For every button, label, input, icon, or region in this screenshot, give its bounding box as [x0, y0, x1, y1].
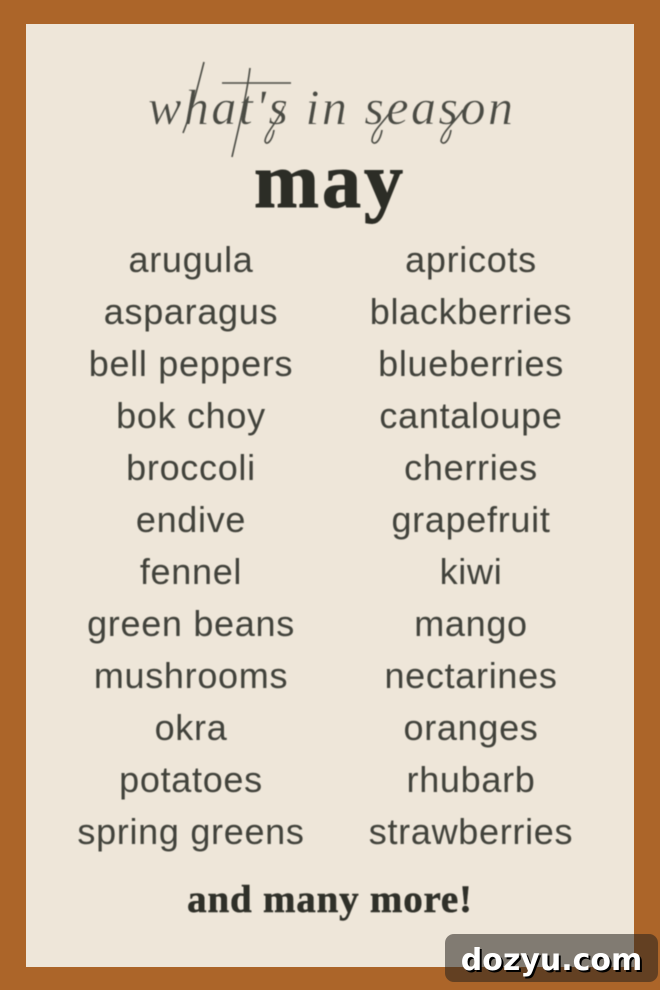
- footer text: and many more!: [187, 878, 473, 921]
- text: arugula: [128, 239, 254, 280]
- text: blackberries: [370, 291, 572, 332]
- text: blueberries: [378, 343, 564, 384]
- text: spring greens: [77, 811, 305, 852]
- text: potatoes: [119, 759, 263, 800]
- watermark badge: [445, 934, 658, 982]
- text: asparagus: [104, 291, 278, 332]
- text: nectarines: [384, 655, 558, 696]
- text: grapefruit: [391, 499, 551, 540]
- text: broccoli: [126, 447, 256, 488]
- text: bok choy: [116, 395, 266, 436]
- script title: what's in season: what's in season: [148, 79, 513, 135]
- text: green beans: [87, 603, 295, 644]
- text: fennel: [140, 551, 242, 592]
- text: cherries: [404, 447, 538, 488]
- text: strawberries: [369, 811, 573, 852]
- script title: what's in season: [148, 61, 513, 158]
- heading: may: may: [254, 137, 406, 224]
- right column of fruits: [369, 239, 573, 852]
- left column of vegetables: [77, 239, 305, 852]
- text: bell peppers: [89, 343, 293, 384]
- text: endive: [136, 499, 246, 540]
- text: cantaloupe: [379, 395, 563, 436]
- text: oranges: [404, 707, 538, 748]
- text: rhubarb: [406, 759, 535, 800]
- text: apricots: [405, 239, 537, 280]
- text: mushrooms: [94, 655, 288, 696]
- text: kiwi: [440, 551, 502, 592]
- watermark badge: dozyu.com: [461, 943, 642, 978]
- text: mango: [414, 603, 528, 644]
- text: okra: [155, 707, 227, 748]
